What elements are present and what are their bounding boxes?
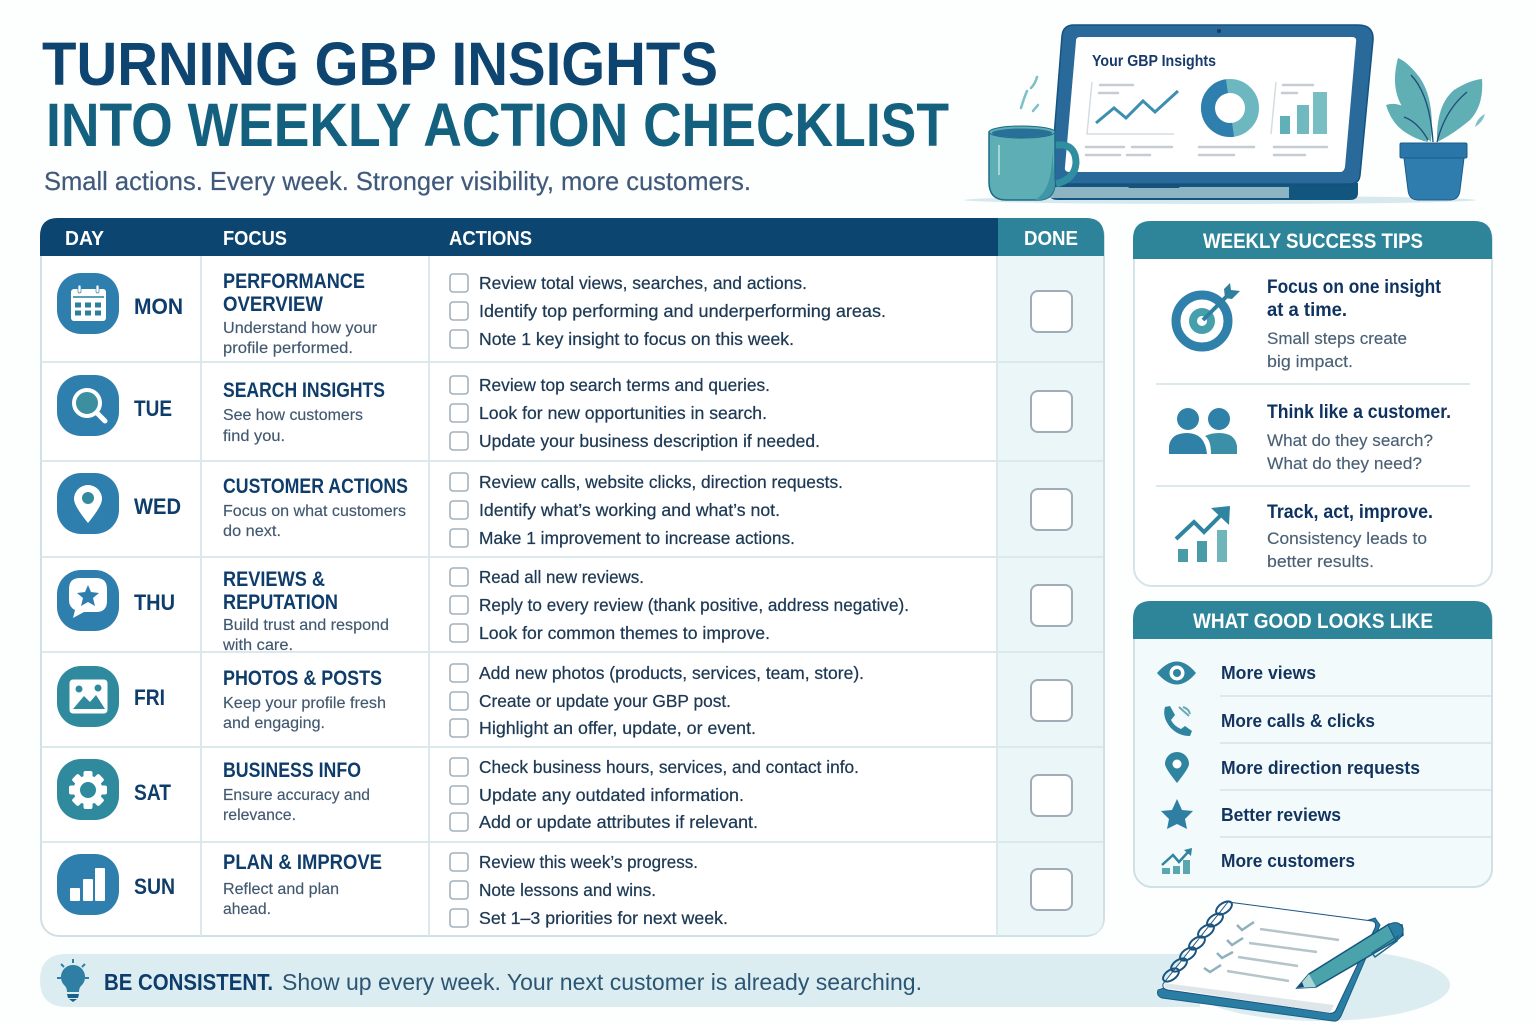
row: Saturday [57,757,1072,832]
tip: think like a customer [1267,402,1451,473]
focus: reviews and reputation: with care. [222,637,293,654]
actions: Wednesday: Make 1 improvement to increase actions. [479,528,795,548]
row: Friday [57,663,1072,738]
focus: business info: relevance. [223,807,296,824]
focus: customer actions [223,475,408,540]
icon: photo [57,666,119,727]
table header: ACTIONS [449,228,532,250]
panel: weekly success tips [1133,221,1492,586]
focus: customer actions: Focus on what customers [223,503,406,520]
done checkbox [1031,391,1072,432]
panel: what good looks like: More direction requests [1221,758,1420,778]
focus: plan and improve: Reflect and plan [223,881,339,898]
panel: what good looks like [1133,601,1492,887]
actions: Sunday [450,852,728,928]
icon: review speech bubble [57,570,119,631]
bar chart [1271,82,1327,134]
actions: Monday: Review total views, searches, and actions. [479,273,807,293]
actions: Sunday: Set 1–3 priorities for next week. [479,908,728,928]
actions: Tuesday: Update your business description if needed. [479,431,820,451]
callout: be consistent footer: Show up every week. Your next customer is already searching. [282,969,922,995]
notebook spiral [1161,899,1234,984]
row: Tuesday: TUE [134,396,172,421]
icon: growth chart [1176,506,1230,562]
tip: focus on one insight: at a time. [1267,300,1347,321]
icon: magnifier [57,375,119,436]
icon: calendar [57,273,119,334]
focus: performance overview: Understand how your [223,320,378,337]
actions: Thursday: Reply to every review (thank positive, address negative). [479,595,909,615]
focus: reviews and reputation: Build trust and respond [223,617,389,634]
actions: Saturday: Check business hours, services, and contact info. [479,757,859,777]
row: Tuesday [57,375,1072,451]
icon: phone [1164,706,1192,736]
tip: focus on one insight: big impact. [1267,352,1353,371]
icon: customers [1169,408,1237,454]
icon: target [1176,283,1240,347]
focus: performance overview: profile performed. [223,340,353,357]
pen [1297,923,1403,988]
actions: Tuesday [450,375,820,451]
icon: growth [1162,848,1192,874]
focus: business info: Ensure accuracy and [223,787,370,804]
coffee mug [989,77,1076,200]
panel: what good looks like: More customers [1221,851,1355,871]
tip: track, act, improve: Track, act, improve. [1267,502,1433,523]
table header: DAY [65,228,105,250]
done checkbox [1031,869,1072,910]
tip: focus on one insight: Focus on one insight [1267,277,1442,298]
panel: weekly checklist table [40,218,1104,936]
illustration: notebook and pen [1158,899,1403,1021]
actions: Monday [450,273,886,349]
actions: Saturday: Update any outdated information. [479,785,744,805]
tip: think like a customer: What do they need? [1267,454,1422,473]
tip: focus on one insight [1267,277,1442,371]
panel: weekly success tips: WEEKLY SUCCESS TIPS [1203,230,1423,253]
focus: plan and improve: ahead. [223,901,271,918]
title [42,30,949,159]
focus: search insights: find you. [223,428,285,445]
actions: Friday: Add new photos (products, services, team, store). [479,663,864,683]
row: Thursday: THU [134,590,175,615]
actions: Friday [450,663,864,738]
row: Monday [57,270,1072,357]
row: Wednesday [57,472,1072,548]
actions: Monday: Note 1 key insight to focus on this week. [479,329,794,349]
callout: be consistent footer [40,949,1450,1021]
row: Saturday: SAT [134,780,171,805]
focus: reviews and reputation: REPUTATION [223,591,338,614]
actions: Thursday [450,567,909,643]
actions: Thursday: Look for common themes to improve. [479,623,770,643]
donut chart [1205,86,1252,133]
panel: what good looks like: WHAT GOOD LOOKS LIKE [1193,610,1433,633]
callout: be consistent footer: BE CONSISTENT. [104,969,273,995]
subtitle: Small actions. Every week. Stronger visibility, more customers. [44,166,751,196]
icon: map pin [57,473,119,534]
panel: what good looks like: More calls & clicks [1221,711,1375,731]
icon: location pin [1165,752,1189,783]
table header [40,218,1104,256]
title: TURNING GBP INSIGHTS [42,30,718,98]
actions: Monday: Identify top performing and underperforming areas. [479,301,886,321]
tip: focus on one insight: Small steps create [1267,329,1407,348]
icon: gear [57,759,119,820]
focus: customer actions: CUSTOMER ACTIONS [223,475,408,498]
icon: bar chart [57,854,119,915]
done checkbox [1031,489,1072,530]
tip: track, act, improve: Consistency leads to [1267,529,1427,548]
focus: photos and posts: Keep your profile fresh [223,695,386,712]
done checkbox [1031,680,1072,721]
actions: Wednesday: Identify what’s working and what’s not. [479,500,780,520]
screen heading: Your GBP Insights [1092,53,1216,70]
icon: star [1161,799,1193,829]
row: Thursday [57,567,1072,654]
focus: business info [223,759,370,824]
line chart [1087,82,1178,134]
focus: performance overview: OVERVIEW [223,293,323,316]
row: Friday: FRI [134,685,165,710]
done checkbox [1031,291,1072,332]
table header: FOCUS [223,228,287,250]
actions: Friday: Create or update your GBP post. [479,691,731,711]
actions: Sunday: Review this week’s progress. [479,852,698,872]
focus: search insights: See how customers [223,407,363,424]
icon: eye [1157,662,1196,684]
actions: Wednesday: Review calls, website clicks, direction requests. [479,472,843,492]
row: Monday: MON [134,294,183,319]
focus: plan and improve: PLAN & IMPROVE [223,851,382,874]
title: INTO WEEKLY ACTION CHECKLIST [46,91,949,159]
actions: Saturday [450,757,859,832]
actions: Tuesday: Look for new opportunities in search. [479,403,767,423]
icon: light bulb [57,959,89,1002]
tip: think like a customer: What do they search? [1267,431,1433,450]
panel: what good looks like: More views [1221,663,1316,683]
laptop [1049,25,1373,200]
focus: photos and posts [223,667,386,732]
table header: DONE [1024,228,1078,250]
row: Wednesday: WED [134,494,181,519]
focus: performance overview: PERFORMANCE [223,270,365,293]
actions: Saturday: Add or update attributes if relevant. [479,812,758,832]
panel: what good looks like: Better reviews [1221,805,1341,825]
actions: Thursday: Read all new reviews. [479,567,644,587]
focus: customer actions: do next. [223,523,281,540]
focus: plan and improve [223,851,382,918]
done column background [997,256,1103,935]
done checkbox [1031,775,1072,816]
focus: photos and posts: and engaging. [223,715,325,732]
row: Sunday: SUN [134,874,175,899]
actions: Tuesday: Review top search terms and queries. [479,375,770,395]
focus: business info: BUSINESS INFO [223,759,361,782]
tip: track, act, improve [1267,502,1433,571]
actions: Sunday: Note lessons and wins. [479,880,656,900]
row: Sunday [57,851,1072,928]
actions: Wednesday [450,472,843,548]
focus: photos and posts: PHOTOS & POSTS [223,667,382,690]
actions: Friday: Highlight an offer, update, or event. [479,718,756,738]
illustration: laptop, mug and plant [964,25,1485,204]
potted plant [1386,58,1485,200]
focus: search insights: SEARCH INSIGHTS [223,379,385,402]
focus: search insights [223,379,385,445]
done checkbox [1031,585,1072,626]
focus: reviews and reputation [222,568,389,654]
checklist lines and ticks [1204,922,1339,981]
focus: performance overview [223,270,378,357]
tip: think like a customer: Think like a customer. [1267,402,1451,423]
focus: reviews and reputation: REVIEWS & [223,568,325,591]
tip: track, act, improve: better results. [1267,552,1374,571]
